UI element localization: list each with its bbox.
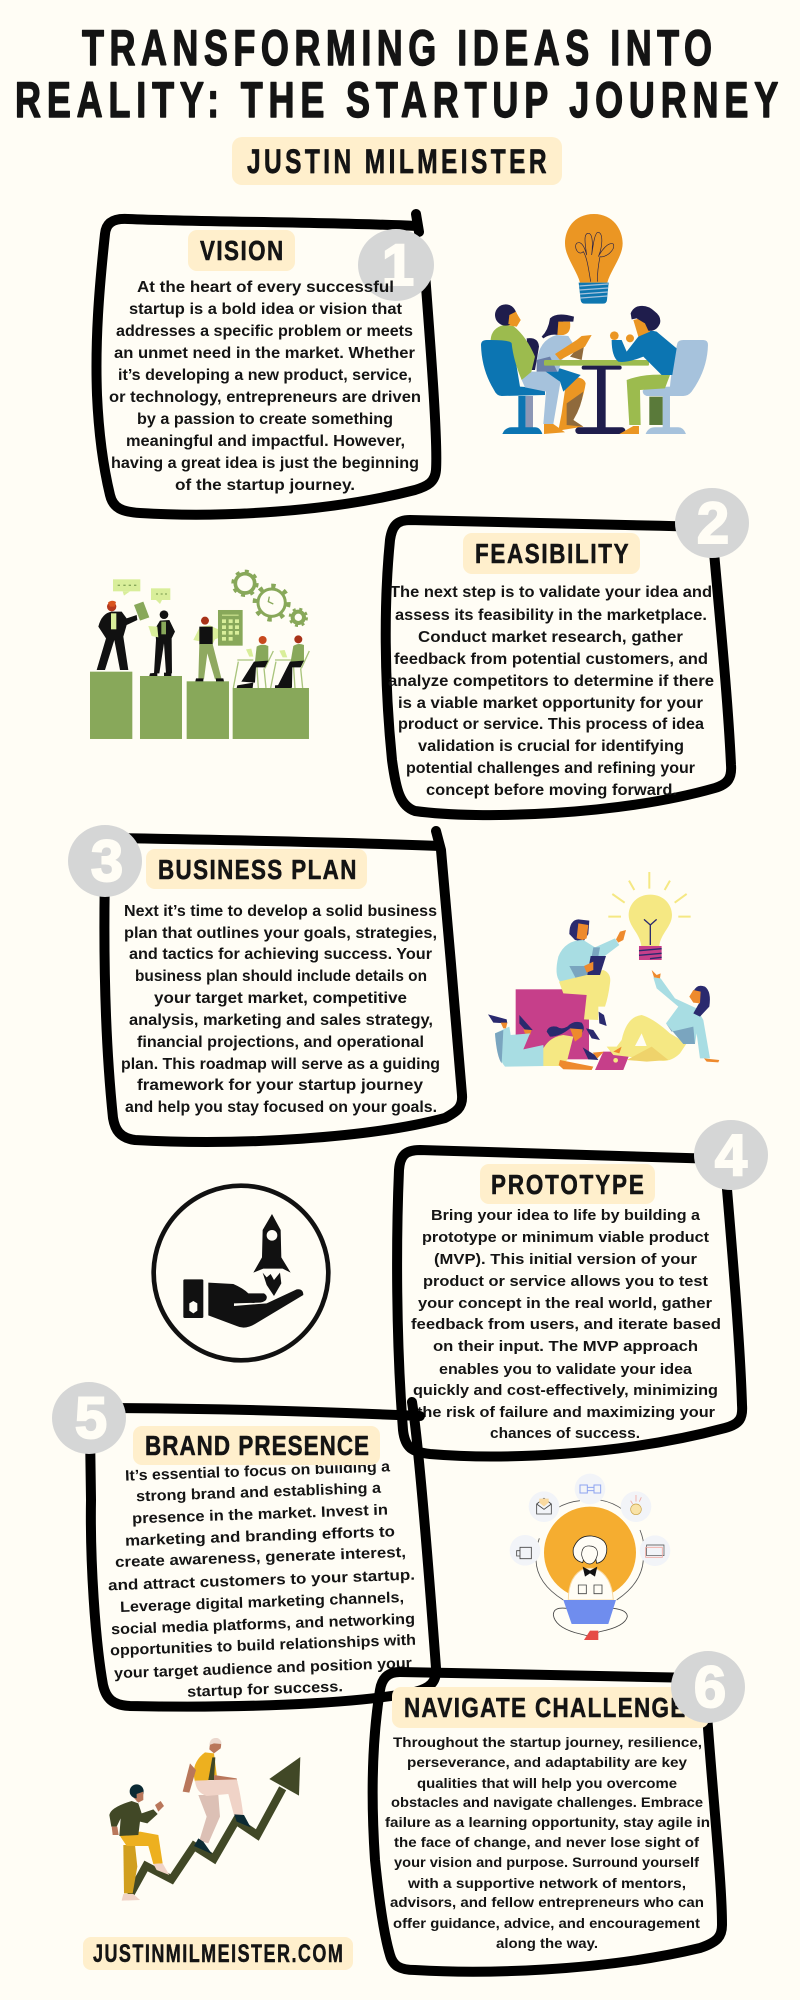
body text: brand presence: your target audience and position your <box>114 1655 412 1682</box>
body text: navigate challenges: perseverance, and adaptability are key <box>407 1754 687 1770</box>
body text: brand presence: It’s essential to focus on building a <box>125 1458 391 1485</box>
body text: business plan: and tactics for achieving success. Your <box>129 946 432 963</box>
title: TRANSFORMING IDEAS INTO <box>82 21 712 76</box>
body text: navigate challenges: offer guidance, advice, and encouragement <box>393 1915 700 1931</box>
number badge 2 <box>675 488 749 558</box>
body text: vision: having a great idea is just the beginning <box>111 455 419 472</box>
heading chip: feasibility <box>463 533 640 574</box>
title <box>15 21 778 128</box>
heading chip: business plan: BUSINESS PLAN <box>158 855 356 886</box>
body text: brand presence: create awareness, generate interest, <box>115 1544 406 1571</box>
body text: business plan: analysis, marketing and sales strategy, <box>129 1012 433 1029</box>
body text: navigate challenges: along the way. <box>496 1935 598 1951</box>
number badge 3 <box>68 825 142 897</box>
body text: prototype: (MVP). This initial version of your <box>434 1251 697 1268</box>
body text: prototype: prototype or minimum viable product <box>422 1229 709 1246</box>
body text: vision: or technology, entrepreneurs are driven <box>109 389 421 406</box>
body text: feasibility: concept before moving forward. <box>426 782 677 799</box>
illustration: person at laptop surrounded by icons <box>510 1474 670 1640</box>
body text: business plan: Next it’s time to develop a solid business <box>124 903 437 920</box>
panel: business plan <box>68 825 462 1142</box>
body text: navigate challenges: failure as a learning opportunity, stay agile in <box>385 1814 710 1830</box>
body text: brand presence: Leverage digital marketing channels, <box>120 1589 404 1616</box>
body text: prototype: your concept in the real world, gather <box>418 1295 712 1312</box>
body text: feasibility: product or service. This process of idea <box>398 716 704 733</box>
illustration: people reaching for a light bulb <box>488 872 719 1070</box>
body text: navigate challenges: advisors, and fellow entrepreneurs who can <box>390 1894 704 1910</box>
body text: navigate challenges: with a supportive network of mentors, <box>407 1875 686 1891</box>
body text: feasibility: feedback from potential customers, and <box>394 651 708 668</box>
body text: brand presence: startup for success. <box>187 1678 343 1701</box>
body text: vision: At the heart of every successful <box>137 279 394 296</box>
heading chip: prototype: PROTOTYPE <box>491 1170 644 1201</box>
author name chip: JUSTIN MILMEISTER <box>247 143 547 181</box>
body text: feasibility: The next step is to validate your idea and <box>390 584 712 601</box>
body text: prototype: product or service allows you to test <box>423 1273 708 1290</box>
body text: navigate challenges: Throughout the startup journey, resilience, <box>393 1734 702 1750</box>
illustration: two people climbing a rising arrow <box>109 1738 300 1901</box>
body text: navigate challenges: qualities that will help you overcome <box>417 1775 677 1791</box>
body text: prototype: quickly and cost-effectively, minimizing <box>413 1382 718 1399</box>
body text: business plan <box>121 903 440 1116</box>
heading chip: vision <box>188 230 295 271</box>
panel: brand presence <box>52 1382 436 1707</box>
number badge 4: 4 <box>715 1123 747 1188</box>
body text: business plan: plan. This roadmap will serve as a guiding <box>121 1056 440 1073</box>
body text: brand presence: marketing and branding efforts to <box>125 1523 395 1550</box>
gears <box>233 571 307 626</box>
body text: brand presence: strong brand and establishing a <box>136 1480 382 1505</box>
body text: brand presence: social media platforms, and networking <box>111 1611 415 1638</box>
body text: vision: it’s developing a new product, service, <box>118 367 412 384</box>
number badge 6: 6 <box>694 1655 726 1720</box>
heading chip: navigate challenges: NAVIGATE CHALLENGES <box>404 1693 702 1724</box>
body text: vision: meaningful and impactful. However, <box>126 433 405 450</box>
body text: prototype: on their input. The MVP approach <box>433 1338 698 1355</box>
icon: rocket launching from open hand in a circle <box>154 1186 328 1360</box>
body text: feasibility: is a viable market opportunity for your <box>398 695 703 712</box>
body text: feasibility: assess its feasibility in the marketplace. <box>395 607 707 624</box>
number badge 4 <box>694 1120 768 1190</box>
body text: brand presence <box>108 1458 416 1701</box>
body text: navigate challenges: the face of change, and never lose sight of <box>394 1834 699 1850</box>
illustration: business team on green blocks with gears <box>90 571 309 739</box>
panel: prototype <box>397 1120 768 1456</box>
panel: navigate challenges <box>373 1651 745 1972</box>
body text: prototype <box>411 1207 721 1442</box>
title: REALITY: THE STARTUP JOURNEY <box>15 73 778 128</box>
body text: prototype: chances of success. <box>490 1425 640 1442</box>
body text: prototype: the risk of failure and maximizing your <box>417 1404 715 1421</box>
body text: prototype: Bring your idea to life by building a <box>431 1207 701 1224</box>
body text: vision: addresses a specific problem or meets <box>116 323 413 340</box>
number badge 1 <box>358 229 434 301</box>
number badge 2: 2 <box>697 491 729 556</box>
body text: prototype: feedback from users, and iterate based <box>411 1316 721 1333</box>
body text: brand presence: opportunities to build relationships with <box>110 1632 416 1659</box>
body text: vision: startup is a bold idea or vision that <box>129 301 403 318</box>
body text: navigate challenges <box>385 1734 710 1951</box>
body text: prototype: enables you to validate your idea <box>439 1361 693 1378</box>
body text: business plan: your target market, competitive <box>154 990 407 1007</box>
website chip: JUSTINMILMEISTER.COM <box>93 1939 343 1968</box>
body text: business plan: plan that outlines your goals, strategies, <box>124 925 437 942</box>
body text: brand presence: and attract customers to your startup. <box>108 1567 415 1594</box>
body text: vision: an unmet need in the market. Whether <box>114 345 415 362</box>
body text: business plan: financial projections, and operational <box>137 1034 424 1051</box>
body text: business plan: and help you stay focused on your goals. <box>125 1099 437 1116</box>
panel: feasibility <box>386 488 749 815</box>
illustration: team at table under light bulb <box>481 214 708 434</box>
body text: feasibility: validation is crucial for identifying <box>418 738 684 755</box>
number badge 6 <box>671 1651 745 1723</box>
body text: navigate challenges: your vision and purpose. Surround yourself <box>394 1854 699 1870</box>
body text: vision: by a passion to create something <box>137 411 393 428</box>
heading chip: feasibility: FEASIBILITY <box>475 539 629 570</box>
heading chip: brand presence: BRAND PRESENCE <box>145 1431 369 1462</box>
body text: business plan: business plan should include details on <box>135 968 427 985</box>
number badge 5: 5 <box>75 1386 107 1451</box>
body text: brand presence: presence in the market. Invest in <box>132 1502 388 1527</box>
number badge 5 <box>52 1382 126 1454</box>
body text: vision: of the startup journey. <box>175 477 355 494</box>
number badge 3: 3 <box>91 829 123 894</box>
body text: business plan: framework for your startup journey <box>137 1077 423 1094</box>
body text: feasibility: potential challenges and refining your <box>406 760 695 777</box>
body text: feasibility: analyze competitors to determine if there <box>388 673 714 690</box>
heading chip: prototype <box>480 1164 655 1204</box>
body text: vision <box>109 279 421 494</box>
body text: feasibility: Conduct market research, gather <box>418 629 683 646</box>
body text: feasibility <box>388 584 714 799</box>
heading chip: business plan <box>146 849 367 889</box>
number badge 1: 1 <box>382 233 414 298</box>
panel: vision <box>96 214 436 515</box>
body text: navigate challenges: obstacles and navigate challenges. Embrace <box>391 1794 703 1810</box>
heading chip: vision: VISION <box>200 236 283 267</box>
